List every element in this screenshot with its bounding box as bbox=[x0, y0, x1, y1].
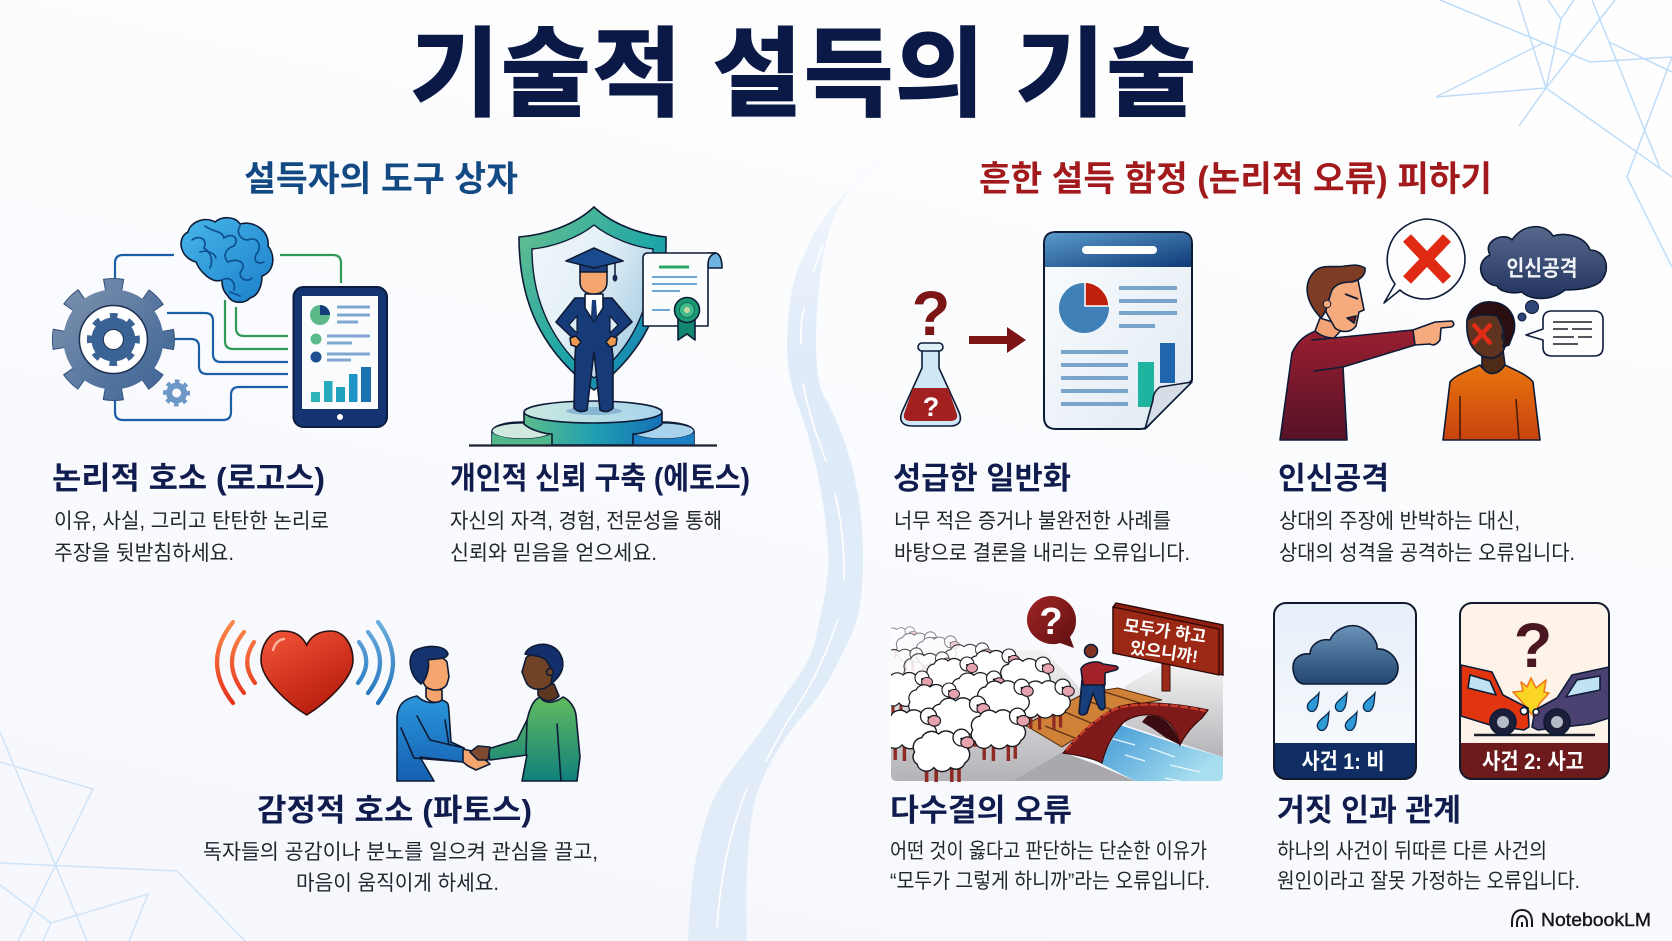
icon: rain cloud bbox=[1293, 626, 1398, 684]
icon: insult thought cloud: 인신공격 bbox=[1506, 256, 1578, 281]
icon: report document bbox=[1044, 232, 1192, 429]
body: logos bbox=[54, 510, 329, 565]
heading: bandwagon: 다수결의 오류 bbox=[890, 793, 1072, 828]
icon: small gear bbox=[164, 381, 189, 405]
body: hasty generalization: 바탕으로 결론을 내리는 오류입니다. bbox=[894, 542, 1190, 565]
body: logos: 주장을 뒷받침하세요. bbox=[54, 542, 234, 565]
arrow bbox=[969, 327, 1026, 353]
panel: false cause bbox=[1274, 603, 1609, 893]
panel: ethos bbox=[450, 207, 750, 565]
panel: logos bbox=[50, 218, 387, 565]
heading: persuader's toolbox: 설득자의 도구 상자 bbox=[244, 160, 518, 199]
body: false cause bbox=[1277, 840, 1580, 893]
icon: podium bbox=[469, 401, 717, 446]
body: bandwagon: “모두가 그렇게 하니까”라는 오류입니다. bbox=[890, 870, 1210, 893]
decorative corner network top right bbox=[1436, 0, 1672, 267]
heading: hasty generalization: 성급한 일반화 bbox=[893, 461, 1071, 496]
panel: bandwagon bbox=[880, 596, 1223, 893]
card: event 1 rain bbox=[1274, 603, 1416, 779]
icon: pointing man bbox=[1280, 265, 1454, 440]
icon: question bubble bbox=[1027, 596, 1076, 648]
icon: graduate bbox=[556, 248, 632, 415]
body: hasty generalization: 너무 적은 증거나 불완전한 사례를 bbox=[894, 510, 1171, 533]
heading: pathos: 감정적 호소 (파토스) bbox=[257, 793, 532, 828]
icon: question mark: ? bbox=[1514, 611, 1552, 681]
icon: brain bbox=[181, 218, 273, 302]
body: ethos: 신뢰와 믿음을 얻으세요. bbox=[450, 542, 657, 565]
icon: flask bbox=[901, 343, 960, 426]
icon: shield bbox=[519, 207, 666, 390]
icon: flask: ? bbox=[923, 392, 939, 422]
illustration: sign bbox=[1113, 603, 1223, 691]
icon: circuit connectors bbox=[115, 255, 341, 420]
body: ethos bbox=[450, 510, 722, 565]
body: ethos: 자신의 자격, 경험, 전문성을 통해 bbox=[450, 510, 722, 533]
icon: question bubble: ? bbox=[1039, 601, 1063, 643]
illustration: walking man bbox=[1079, 644, 1118, 715]
NotebookLM logo: NotebookLM bbox=[1541, 910, 1651, 930]
body: ad hominem bbox=[1279, 510, 1575, 565]
title: 기술적 설득의 기술 bbox=[410, 20, 1196, 129]
panel: pathos bbox=[203, 622, 598, 895]
icon: man in green bbox=[488, 644, 580, 781]
decorative river divider bbox=[688, 155, 890, 941]
icon: dark car bbox=[1532, 667, 1609, 730]
body: false cause: 원인이라고 잘못 가정하는 오류입니다. bbox=[1277, 870, 1580, 893]
illustration: sign: 있으니까! bbox=[1129, 638, 1199, 667]
card: event 2 accident: 사건 2: 사고 bbox=[1482, 749, 1584, 774]
body: pathos: 독자들의 공감이나 분노를 일으켜 관심을 끌고, bbox=[203, 841, 598, 864]
body: pathos bbox=[203, 841, 598, 895]
icon: tablet with charts bbox=[294, 287, 387, 427]
icon: certificate bbox=[643, 253, 722, 340]
body: ad hominem: 상대의 주장에 반박하는 대신, bbox=[1279, 510, 1520, 533]
illustration: sign: 모두가 하고 bbox=[1123, 616, 1207, 647]
panel: ad hominem bbox=[1278, 219, 1606, 565]
icon: rain drops bbox=[1307, 693, 1375, 730]
icon: heart with waves bbox=[217, 622, 393, 715]
icon: attacked person bbox=[1443, 302, 1540, 440]
icon: man in blue bbox=[397, 646, 464, 781]
card: event 2 accident bbox=[1460, 603, 1609, 779]
icon: handshake bbox=[463, 746, 490, 770]
card: event 1 rain: 사건 1: 비 bbox=[1302, 749, 1384, 774]
body: pathos: 마음이 움직이게 하세요. bbox=[296, 872, 499, 895]
icon: speech bubble with X bbox=[1384, 219, 1465, 303]
icon: explosion bbox=[1513, 678, 1549, 716]
body: bandwagon: 어떤 것이 옳다고 판단하는 단순한 이유가 bbox=[890, 840, 1207, 863]
panel: hasty generalization bbox=[893, 232, 1192, 565]
icon: insult thought cloud bbox=[1481, 227, 1606, 321]
icon: red car bbox=[1461, 665, 1529, 730]
icon: question mark: ? bbox=[912, 279, 950, 349]
illustration: flock of sheep bbox=[880, 627, 1074, 784]
body: bandwagon bbox=[890, 840, 1210, 893]
decorative corner network bottom left bbox=[0, 732, 245, 941]
icon: large gear bbox=[50, 276, 177, 403]
heading: ethos: 개인적 신뢰 구축 (에토스) bbox=[450, 461, 750, 496]
icon: small text bubble bbox=[1526, 311, 1603, 356]
body: false cause: 하나의 사건이 뒤따른 다른 사건의 bbox=[1277, 840, 1547, 863]
heading: logos: 논리적 호소 (로고스) bbox=[52, 461, 325, 496]
illustration: wooden bridge bbox=[1025, 688, 1208, 763]
body: hasty generalization bbox=[894, 510, 1190, 565]
body: ad hominem: 상대의 성격을 공격하는 오류입니다. bbox=[1279, 542, 1575, 565]
illustration: ground and river bbox=[891, 650, 1223, 782]
heading: false cause: 거짓 인과 관계 bbox=[1277, 793, 1461, 828]
body: logos: 이유, 사실, 그리고 탄탄한 논리로 bbox=[54, 510, 329, 533]
heading: ad hominem: 인신공격 bbox=[1278, 461, 1389, 496]
heading: common traps: 흔한 설득 함정 (논리적 오류) 피하기 bbox=[979, 160, 1492, 199]
